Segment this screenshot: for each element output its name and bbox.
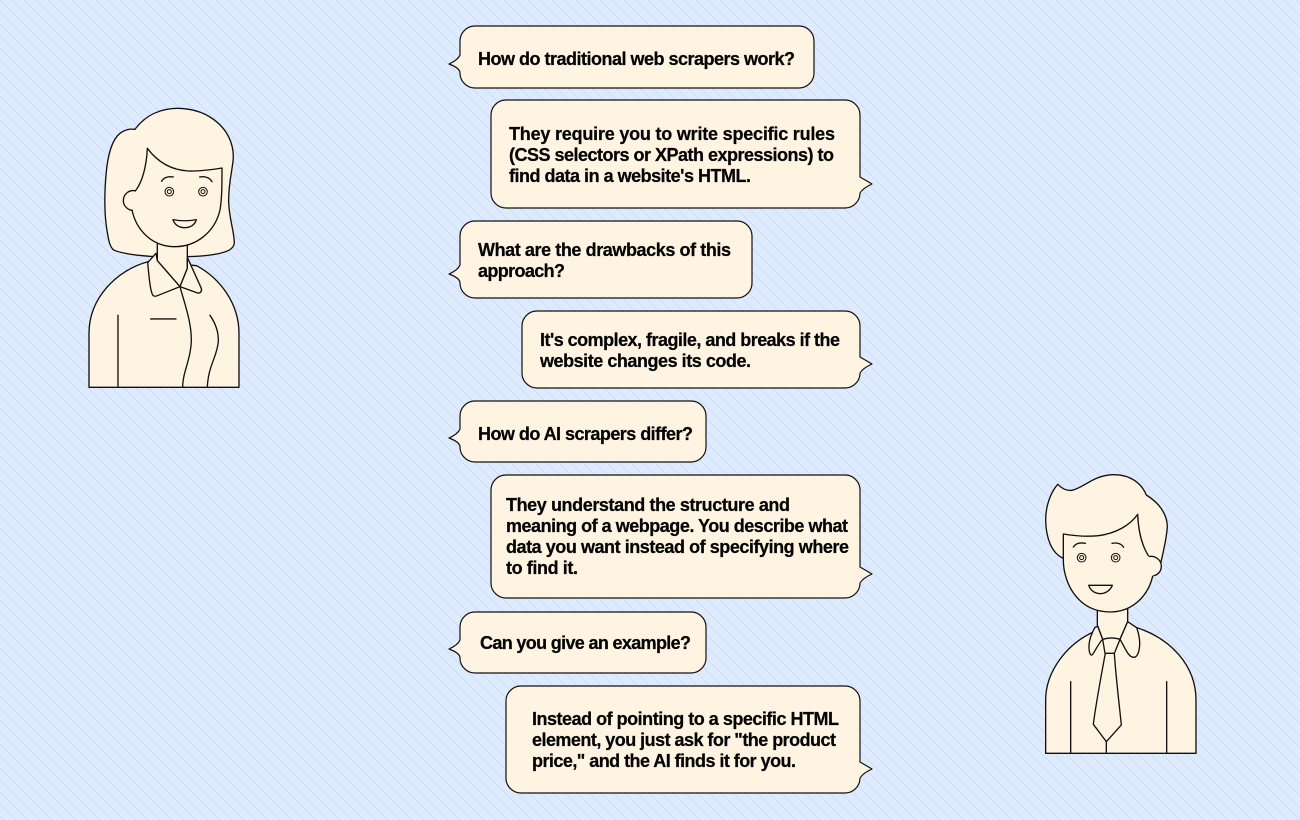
man right collar [1120,622,1140,657]
bubble: they understand structure and meaning: data you want instead of specifying where [506,537,849,557]
bubble: they understand structure and meaning: meaning of a webpage. You describe what [506,516,848,536]
bubble: they understand structure and meaning: to find it. [506,558,578,578]
bubble: how do traditional web scrapers work [449,26,814,88]
bubble: they understand structure and meaning [491,475,872,598]
man shirt details [1071,682,1167,753]
illustration: woman [89,108,239,387]
illustration: man [1046,475,1196,753]
woman hair [105,108,234,257]
bubble: ask for the product price [506,686,872,793]
bubble: ask for the product price: Instead of pointing to a specific HTML [532,709,839,729]
bubble: ask for the product price: element, you just ask for "the product [532,730,836,750]
man neck [1097,607,1128,639]
man hair [1046,475,1167,563]
bubble: what are the drawbacks [449,221,752,298]
bubble: they require specific rules: (CSS selectors or XPath expressions) to [509,145,834,165]
woman body [89,262,239,387]
woman brows, eyes and mouth [162,177,212,228]
man left collar [1089,626,1103,655]
bubble: they understand structure and meaning: They understand the structure and [506,495,790,515]
man ear [1143,556,1161,576]
man face [1063,514,1154,612]
bubble: they require specific rules [491,100,872,208]
bubble: what are the drawbacks: What are the drawbacks of this [478,240,731,260]
woman ear [123,191,140,211]
woman neck [157,238,187,287]
woman left collar [148,253,180,296]
man brows, eyes and mouth [1073,543,1124,594]
bubble: can you give an example: Can you give an example? [480,633,691,653]
bubble: what are the drawbacks: approach? [478,261,565,281]
woman right collar [180,257,201,293]
bubble: complex and fragile [522,311,872,388]
bubble: ask for the product price: price," and the AI finds it for you. [532,751,796,771]
woman shirt details [118,287,218,387]
bubble: can you give an example [449,612,706,673]
bubble: how do traditional web scrapers work: How do traditional web scrapers work? [478,49,795,69]
bubble: they require specific rules: They require you to write specific rules [509,124,835,144]
bubble: how do AI scrapers differ [449,401,706,462]
bubble: how do AI scrapers differ: How do AI scrapers differ? [478,424,693,444]
bubble: complex and fragile: It's complex, fragile, and breaks if the [540,330,840,350]
bubble: complex and fragile: website changes its code. [539,351,751,371]
man tie [1093,638,1121,742]
man body [1046,628,1196,753]
woman face [132,148,222,247]
bubble: they require specific rules: find data in a website's HTML. [509,166,751,186]
